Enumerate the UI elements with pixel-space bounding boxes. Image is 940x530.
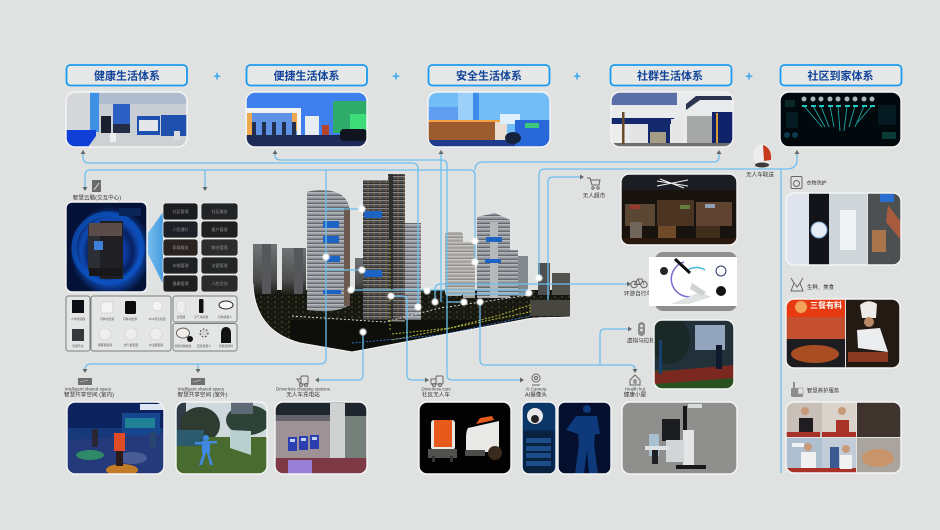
plus sign 1: + [213,68,221,84]
icon: virtual marathon [638,322,645,336]
label: indoor shared space: 智慧共享空间 (室内) [64,390,114,398]
label: fresh food and dining: 生鲜、美食 [807,283,835,291]
label: driverless cars [421,386,451,398]
icon: health hut [630,375,640,385]
blue projection beam [148,212,163,284]
icon: fresh food [791,278,803,291]
icon: AI camera [532,374,540,385]
label: outdoor shared space [177,386,228,398]
icon: shared bicycle [631,279,647,288]
image: virtual marathon track [650,316,734,389]
image: health hut machine [622,402,737,474]
label: smart maintenance service: 智慧养护服务 [807,386,840,394]
grid: smart brain function tiles: 家政服务 [172,244,188,250]
connection nodes [322,204,544,336]
panel: smart devices: 扫地机器人 [218,315,232,319]
label: health hut: Health hut [625,386,646,392]
ground route lines [292,240,530,343]
label: driverless cars: Driverless cars [421,386,451,392]
heading: safe life system [428,65,550,86]
icon: smart maintenance [791,382,803,397]
panel: smart devices: 空气净化器 [194,315,208,319]
image: smart brain screen [66,202,147,292]
panel: smart devices: SOS紧急按钮 [148,317,166,321]
label: health hut [624,386,647,398]
panel: smart devices: 智能开关 [72,344,84,348]
image: community to home dashboard [780,92,901,147]
image: convenient life gate [246,92,367,147]
panel: smart devices: 可移动监测 [123,317,137,321]
label: driverless cars: 社区无人车 [422,390,450,398]
image: outdoor shared lawn [176,402,270,474]
panel: smart devices: 智能按摩椅 [219,344,233,348]
grid: smart brain function tiles: 访客管理 [212,262,228,268]
image: health life lobby [66,92,187,147]
city aerial model [253,174,570,356]
image: AI body scan [558,402,611,474]
icon: delivery robot [753,144,771,168]
label: AI camera: AI Camera [526,386,547,392]
label: unmanned supermarket: 无人超市 [583,192,606,200]
label: indoor shared space: Intelligent shared space [65,386,112,392]
image: restaurant and chef [786,299,900,368]
grid: smart brain function tiles: 车辆管理 [172,262,188,268]
label: laundry care: 衣物洗护 [806,180,827,186]
icon: smart brain panel [92,180,101,192]
icon: washing machine [791,176,802,188]
label: driverless charging stations: Driverless charging stations [276,386,331,392]
connector lines [83,152,797,473]
image: indoor interactive floor [67,402,164,476]
panel: smart devices: 燃气报警器 [124,343,138,347]
panel: smart devices: 智能宠物喂食 [175,344,192,348]
icon: outdoor shared space [191,378,205,385]
heading: community to home system: 社区到家体系 [808,68,874,82]
panel: smart devices: 加湿器 [177,315,185,319]
icon: indoor shared space [78,378,92,385]
label: virtual marathon: 虚拟马拉松 [627,336,655,344]
label: AI camera [525,386,547,398]
panel: smart devices: 烟雾报警器 [98,343,112,347]
heading: convenient life system [246,65,367,86]
panel: smart devices: 可移动监测 [100,317,114,321]
plus sign 2: + [392,68,400,84]
heading: health life system [66,65,187,86]
image: smart bicycle [649,252,737,311]
heading: health life system: 健康生活体系 [94,68,160,82]
image: restaurant and chef: 三餐有料 [810,300,842,310]
image: home maintenance services [786,402,901,473]
label: outdoor shared space: 智慧共享空间 (室外) [177,390,228,398]
heading: convenient life system: 便捷生活体系 [274,68,340,82]
icon: supermarket cart [587,178,600,189]
heading: community life system [610,65,732,86]
image: unmanned supermarket [621,174,737,245]
grid: smart brain function tiles: 人脸识别 [212,280,228,286]
image: charging station room [275,402,367,474]
label: outdoor shared space: Intelligent shared space [178,386,225,392]
heading: community to home system [780,65,902,86]
image: community life building [611,92,733,147]
panel: smart devices [66,296,237,351]
grid: smart brain function tiles: 社区服务 [212,208,228,214]
grid: smart brain function tiles: 人脸通行 [172,226,188,232]
label: indoor shared space [64,386,114,398]
grid: smart brain function tiles: 健康管理 [172,280,188,286]
blue highlighted floors [323,211,502,294]
label: smart brain interaction center: 智慧云脑(交互中心) [73,194,121,202]
label: health hut: 健康小屋 [624,390,647,398]
grid: smart brain function tiles: 物业管理 [212,244,228,250]
heading: community life system: 社群生活体系 [637,68,703,82]
grid: smart brain function tiles: 客户管理 [212,226,228,232]
image: driverless cars [419,402,511,474]
grid: smart brain function tiles: 社区管理 [172,208,188,214]
label: driverless charging stations [276,386,331,398]
panel: smart devices: 四足机器人 [197,344,211,348]
arrowheads [80,150,800,382]
plus sign 4: + [745,68,753,84]
icon: charging truck [297,376,308,386]
image: safe life perimeter [428,92,550,147]
icon: driverless car [431,376,443,386]
label: AI camera: AI摄像头 [525,390,547,398]
grid: smart brain function tiles [163,203,238,292]
panel: smart devices: 人体传感器 [71,317,85,321]
label: shared bicycle: 环游自行车 [624,290,652,298]
plus sign 3: + [573,68,581,84]
label: driverless charging stations: 无人车充电站 [286,390,320,398]
image: AI camera app [522,402,556,474]
image: laundry [786,193,901,265]
heading: safe life system: 安全生活体系 [456,68,522,82]
panel: smart devices: 水浸报警器 [149,343,163,347]
label: delivery by robot: 无人车取送 [746,170,774,178]
